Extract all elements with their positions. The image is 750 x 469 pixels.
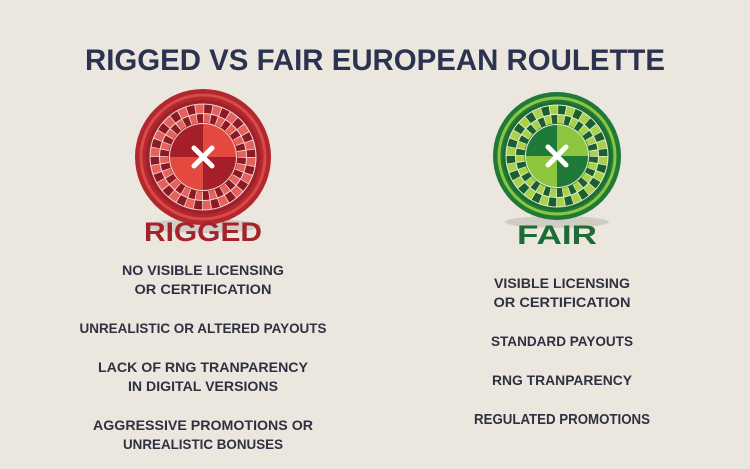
icon: rigged roulette wheel — [135, 89, 271, 233]
text block: rigged signs: NO VISIBLE LICENSING — [122, 262, 284, 278]
text block: fair signs: OR CERTIFICATION — [494, 294, 630, 310]
title: RIGGED VS FAIR EUROPEAN ROULETTE — [85, 44, 665, 77]
text block: fair signs: REGULATED PROMOTIONS — [474, 412, 650, 428]
text block: rigged signs: AGGRESSIVE PROMOTIONS OR — [93, 417, 313, 433]
text block: rigged signs: IN DIGITAL VERSIONS — [128, 378, 278, 394]
text block: fair signs: RNG TRANPARENCY — [492, 372, 633, 388]
icon: fair roulette wheel — [493, 92, 621, 228]
text block: rigged signs: UNREALISTIC OR ALTERED PAYOUTS — [80, 320, 326, 336]
text block: rigged signs: UNREALISTIC BONUSES — [123, 436, 283, 452]
label: FAIR: FAIR — [517, 220, 597, 250]
text block: fair signs: STANDARD PAYOUTS — [491, 333, 633, 349]
text block: rigged signs: LACK OF RNG TRANPARENCY — [98, 359, 309, 375]
label: RIGGED: RIGGED — [144, 217, 262, 247]
text block: fair signs: VISIBLE LICENSING — [494, 275, 630, 291]
text block: fair signs — [474, 275, 650, 428]
text block: rigged signs — [80, 262, 326, 452]
text block: rigged signs: OR CERTIFICATION — [134, 281, 272, 297]
